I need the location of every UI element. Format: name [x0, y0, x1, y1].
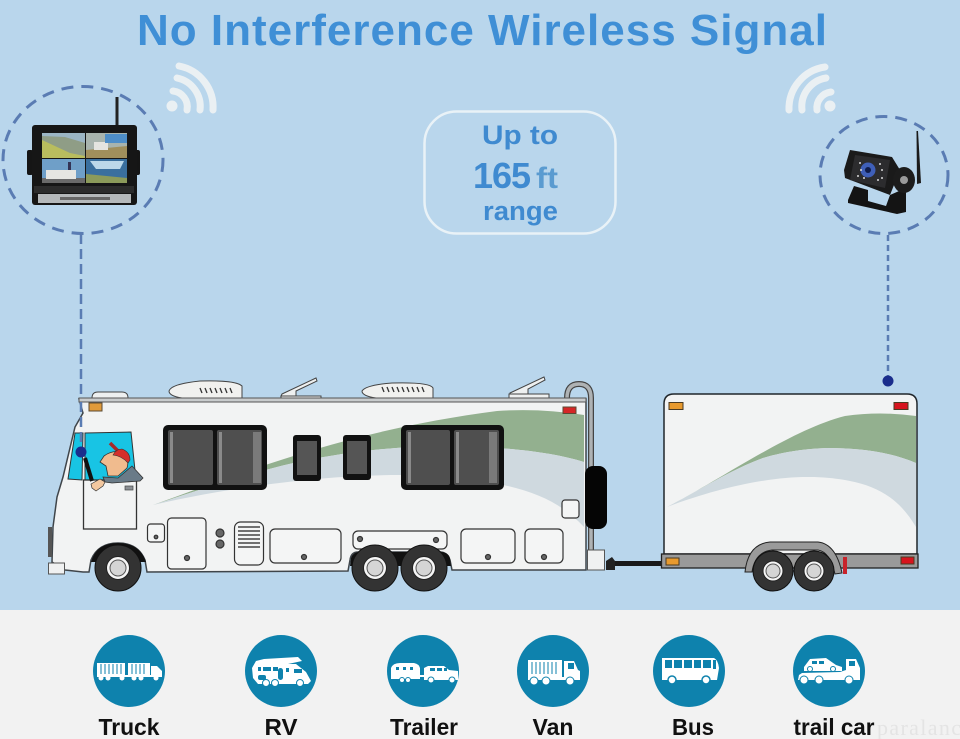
camera callout [820, 116, 948, 234]
RV [48, 377, 615, 591]
range text: 165 [473, 155, 531, 196]
range text: Up to [482, 120, 558, 150]
icon: cargo truck [517, 635, 589, 707]
trailer lights [666, 402, 914, 565]
rear bumper and hitch [588, 550, 615, 570]
body [52, 399, 586, 572]
title: No Interference Wireless Signal [137, 6, 827, 55]
rear mirror [585, 466, 607, 529]
windows [163, 425, 504, 490]
trailer swoosh [667, 414, 916, 527]
range text: ft [536, 162, 558, 195]
vehicle type: RV [245, 635, 317, 739]
red strip [843, 557, 847, 574]
body swoosh [153, 410, 584, 527]
vehicle type: truck [93, 635, 165, 739]
range text [473, 120, 558, 226]
roof strip [79, 398, 586, 402]
trailer frame [662, 554, 918, 568]
monitor callout [3, 86, 163, 234]
marker lights [89, 403, 576, 414]
icon: monitor [27, 97, 140, 205]
cab connector dash and dot [76, 402, 86, 458]
range text: range [483, 196, 558, 226]
wheels [91, 543, 451, 591]
dashed circle [3, 86, 163, 234]
rear ladder [567, 384, 591, 552]
storage compartments [148, 500, 579, 569]
icon: bus [653, 635, 725, 707]
driver [85, 443, 143, 491]
range badge [424, 112, 616, 234]
trailer wheels [753, 551, 834, 591]
icon: wifi signal left [166, 66, 213, 112]
front bumper [48, 527, 64, 574]
connector: camera to trailer [882, 235, 894, 386]
icon: camera [844, 131, 921, 214]
vehicle type: bus [653, 635, 725, 739]
icon: trailer and car [387, 635, 459, 707]
cab door [84, 480, 136, 529]
icon: truck [93, 635, 165, 707]
cab windows [68, 432, 136, 480]
roof equipment [92, 377, 549, 399]
vehicle type: trailer [387, 635, 459, 739]
icon: RV [245, 635, 317, 707]
dashed circle [820, 116, 948, 234]
vehicle type: van [517, 635, 589, 739]
roof vents on AC [200, 387, 424, 393]
connector: monitor to RV cab [80, 234, 82, 398]
icon: tow truck [793, 635, 865, 707]
trailer body [664, 394, 917, 554]
icon: wifi signal right [789, 67, 836, 112]
trailer [662, 394, 918, 591]
tow bar [615, 561, 662, 566]
fender [745, 542, 842, 574]
vehicle type: trail car [793, 635, 875, 739]
